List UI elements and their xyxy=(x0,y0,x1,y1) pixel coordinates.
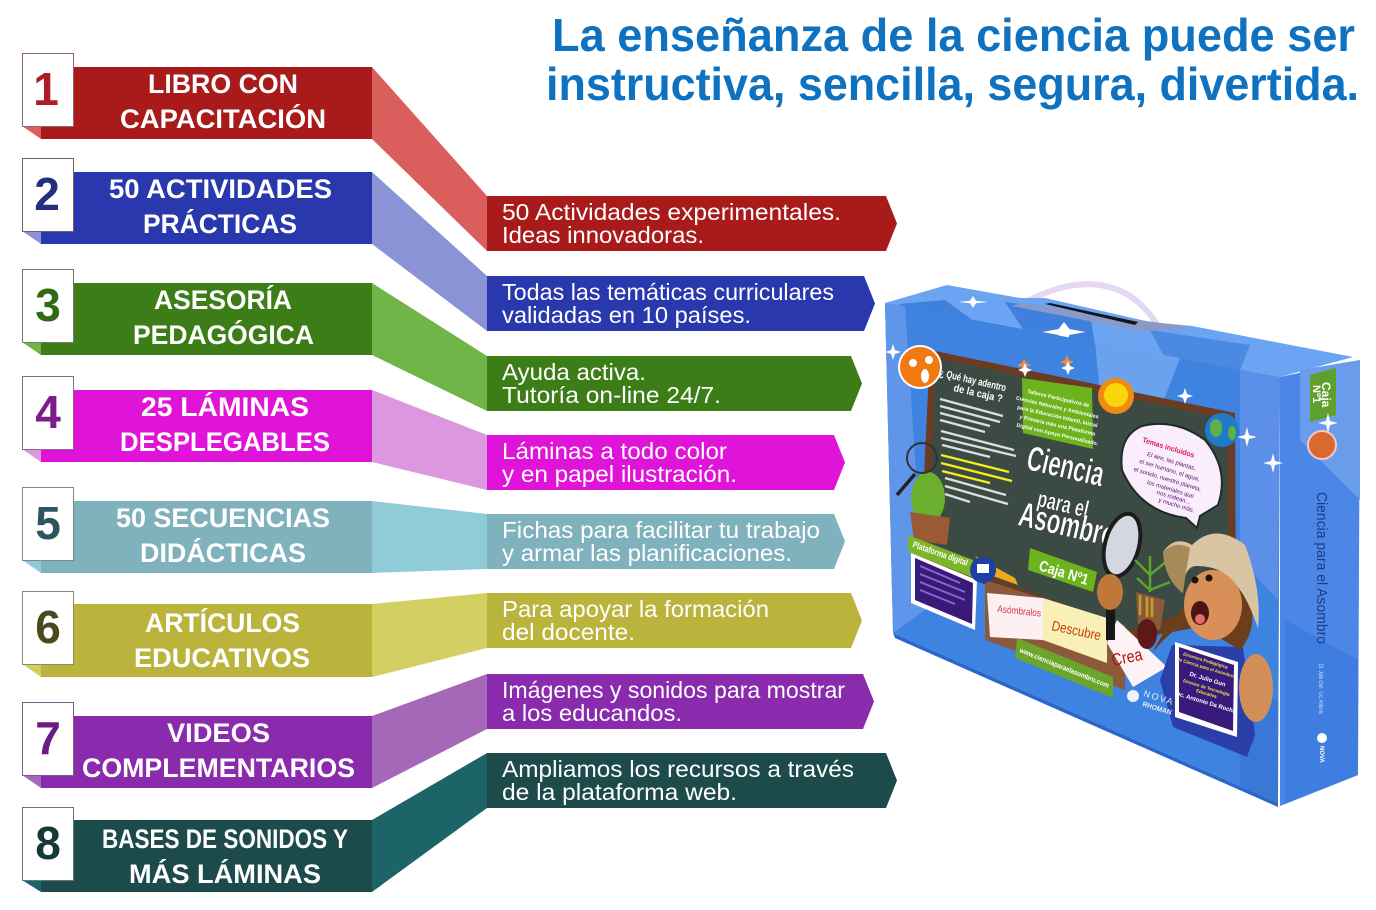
item 7: videos complementarios: 7 xyxy=(35,712,61,764)
caja label xyxy=(1028,548,1097,592)
box top face xyxy=(885,285,1353,377)
credits panel xyxy=(1174,642,1238,737)
title xyxy=(546,9,1359,110)
item 3: asesoría pedagógica: ASESORÍA xyxy=(154,284,292,315)
box heading: ciencia para el asombro xyxy=(1015,439,1119,555)
credits panel: Educativa xyxy=(1196,688,1218,699)
item 8: bases de sonidos y más láminas: BASES DE SONIDOS Y xyxy=(102,824,348,854)
plant and pencils xyxy=(1135,556,1170,649)
speech bubble: el ser humano, el agua, xyxy=(1138,459,1200,483)
digital platform panel: Plataforma digital xyxy=(911,539,969,568)
item 1: libro con capacitación: LIBRO CON xyxy=(148,69,298,99)
green note: para la Educación Infantil, Inicial xyxy=(1017,405,1098,429)
item 4: 25 láminas desplegables: Láminas a todo color xyxy=(502,438,727,464)
product box illustration xyxy=(885,284,1360,807)
green note: Ciencias Naturales y Ambientales xyxy=(1015,396,1099,420)
credits panel: de Ciencia para el Asombro xyxy=(1176,657,1235,679)
star decorations xyxy=(885,344,1283,473)
item 7: videos complementarios xyxy=(22,674,874,788)
green note xyxy=(1015,378,1099,449)
item 6: artículos educativos: del docente. xyxy=(502,619,635,645)
speech bubble: Temas incluidos xyxy=(1141,435,1196,460)
dress xyxy=(1160,645,1255,757)
item 3: asesoría pedagógica: Tutoría on-line 24/7. xyxy=(502,382,721,408)
credits panel: Directora Pedagógica xyxy=(1183,651,1229,670)
item 3: asesoría pedagógica: PEDAGÓGICA xyxy=(133,319,314,350)
item 3: asesoría pedagógica: 3 xyxy=(35,279,61,331)
credits panel: Lic. Antonio Da Rocha xyxy=(1174,691,1237,715)
item 2: 50 actividades prácticas: Todas las temáticas curriculares xyxy=(502,279,834,305)
speech bubble xyxy=(1121,424,1222,528)
item 2: 50 actividades prácticas: 2 xyxy=(34,168,60,220)
board contents list: ¿ Qué hay adentro xyxy=(938,367,1007,394)
item 6: artículos educativos: ARTÍCULOS xyxy=(145,607,300,638)
item 4: 25 láminas desplegables: DESPLEGABLES xyxy=(120,427,330,457)
item 5: 50 secuencias didácticas: 50 SECUENCIAS xyxy=(116,503,330,533)
card: asómbralos xyxy=(987,593,1043,640)
item 1: libro con capacitación xyxy=(22,54,897,251)
speech bubble: los materiales que xyxy=(1146,480,1195,500)
item 7: videos complementarios: VIDEOS xyxy=(167,718,270,748)
card: crea: Crea xyxy=(1110,645,1145,670)
item 2: 50 actividades prácticas: PRÁCTICAS xyxy=(143,208,297,239)
speech bubble: El aire, las plantas, xyxy=(1146,452,1197,472)
arm xyxy=(1239,654,1273,722)
item 8: bases de sonidos y más láminas: de la plataforma web. xyxy=(502,779,737,805)
item 6: artículos educativos: EDUCATIVOS xyxy=(134,643,310,673)
side tag xyxy=(1310,368,1336,422)
item 2: 50 actividades prácticas: validadas en 10 países. xyxy=(502,302,751,328)
item 7: videos complementarios: COMPLEMENTARIOS xyxy=(82,753,355,783)
item 8: bases de sonidos y más láminas xyxy=(22,753,897,892)
item 5: 50 secuencias didácticas: 5 xyxy=(35,497,61,549)
item 2: 50 actividades prácticas: 50 ACTIVIDADES xyxy=(109,174,332,204)
magnifying glass xyxy=(1097,510,1147,640)
item 6: artículos educativos: 6 xyxy=(35,601,61,653)
item 6: artículos educativos: Para apoyar la formación xyxy=(502,596,769,622)
speech bubble: el sonido, nuestro planeta, xyxy=(1133,467,1202,493)
speech bubble: nos rodean... xyxy=(1156,490,1191,506)
website strip: www.cienciaparaelasombro.com xyxy=(1017,647,1110,690)
credits panel: Director de Tecnología xyxy=(1183,678,1231,697)
wooden shelf xyxy=(985,580,1125,690)
item 4: 25 láminas desplegables: 25 LÁMINAS xyxy=(141,391,309,422)
side logo: NOVA xyxy=(1318,746,1324,764)
sun xyxy=(1098,378,1134,414)
side title: Ciencia para el Asombro xyxy=(1313,492,1329,644)
hair xyxy=(1153,585,1252,652)
side tag: Caja xyxy=(1319,382,1333,408)
board contents list: de la caja ? xyxy=(952,382,1004,405)
face xyxy=(1184,570,1242,640)
board contents list xyxy=(938,367,1016,504)
green note: Digital con Apoyo Personalizado. xyxy=(1016,423,1099,447)
hat xyxy=(1163,534,1259,628)
box handle xyxy=(1018,284,1160,330)
item 2: 50 actividades prácticas xyxy=(22,158,875,331)
publisher logo on front: RHOMAN xyxy=(1141,701,1172,717)
girl with hat xyxy=(1153,534,1273,757)
title: instructiva, sencilla, segura, divertida. xyxy=(546,58,1359,110)
item 8: bases de sonidos y más láminas: 8 xyxy=(35,817,61,869)
item 3: asesoría pedagógica: Ayuda activa. xyxy=(502,359,646,385)
item 4: 25 láminas desplegables xyxy=(22,376,845,490)
face circle sticker xyxy=(899,346,941,388)
side credits: Dr. Julio Gun · Lic. Antonio xyxy=(1317,664,1323,714)
box heading: ciencia para el asombro: Asombro xyxy=(1015,495,1119,555)
globe sticker xyxy=(1205,413,1239,447)
item 8: bases de sonidos y más láminas: Ampliamos los recursos a través xyxy=(502,756,854,782)
box heading: ciencia para el asombro: para el xyxy=(1035,486,1091,524)
green note: y Primaria más una Plataforma xyxy=(1019,414,1096,438)
box front face xyxy=(885,303,1280,807)
speech bubble: y mucho más. xyxy=(1158,498,1195,514)
publisher logo on front xyxy=(1127,688,1174,717)
item 1: libro con capacitación: Ideas innovadoras. xyxy=(502,222,704,248)
item 4: 25 láminas desplegables: y en papel ilustración. xyxy=(502,461,737,487)
caja label: Caja Nº1 xyxy=(1037,558,1091,589)
item 3: asesoría pedagógica xyxy=(22,270,862,411)
item 5: 50 secuencias didácticas: DIDÁCTICAS xyxy=(140,537,306,568)
item 4: 25 láminas desplegables: 4 xyxy=(35,386,61,438)
green note: Talleres Participativos de xyxy=(1027,389,1090,409)
title: La enseñanza de la ciencia puede ser xyxy=(552,9,1355,61)
item 8: bases de sonidos y más láminas: MÁS LÁMINAS xyxy=(129,858,321,889)
item 5: 50 secuencias didácticas: Fichas para facilitar tu trabajo xyxy=(502,517,820,543)
box heading: ciencia para el asombro: Ciencia xyxy=(1023,439,1108,494)
item 5: 50 secuencias didácticas xyxy=(22,488,845,573)
card: descubre xyxy=(1043,598,1107,663)
digital platform panel xyxy=(908,535,1018,630)
item 5: 50 secuencias didácticas: y armar las planificaciones. xyxy=(502,540,792,566)
item 1: libro con capacitación: 50 Actividades experimentales. xyxy=(502,199,841,225)
card: asómbralos: Asómbralos xyxy=(997,604,1042,620)
side tag: Nº1 xyxy=(1310,385,1322,403)
card: crea xyxy=(1107,620,1167,687)
chalkboard xyxy=(920,350,1236,640)
side circle xyxy=(1308,431,1336,459)
card: descubre: Descubre xyxy=(1050,617,1103,643)
plant pot and small magnifier xyxy=(897,443,950,545)
item 6: artículos educativos xyxy=(22,592,862,677)
publisher logo on front: NOVA xyxy=(1142,688,1174,707)
item 1: libro con capacitación: 1 xyxy=(33,63,59,115)
credits panel: Dr. Julio Gun xyxy=(1189,672,1226,688)
box side face xyxy=(1280,360,1360,806)
side logo xyxy=(1317,733,1327,764)
item 1: libro con capacitación: CAPACITACIÓN xyxy=(120,103,326,134)
item 7: videos complementarios: a los educandos. xyxy=(502,700,682,726)
item 7: videos complementarios: Imágenes y sonidos para mostrar xyxy=(502,677,845,703)
